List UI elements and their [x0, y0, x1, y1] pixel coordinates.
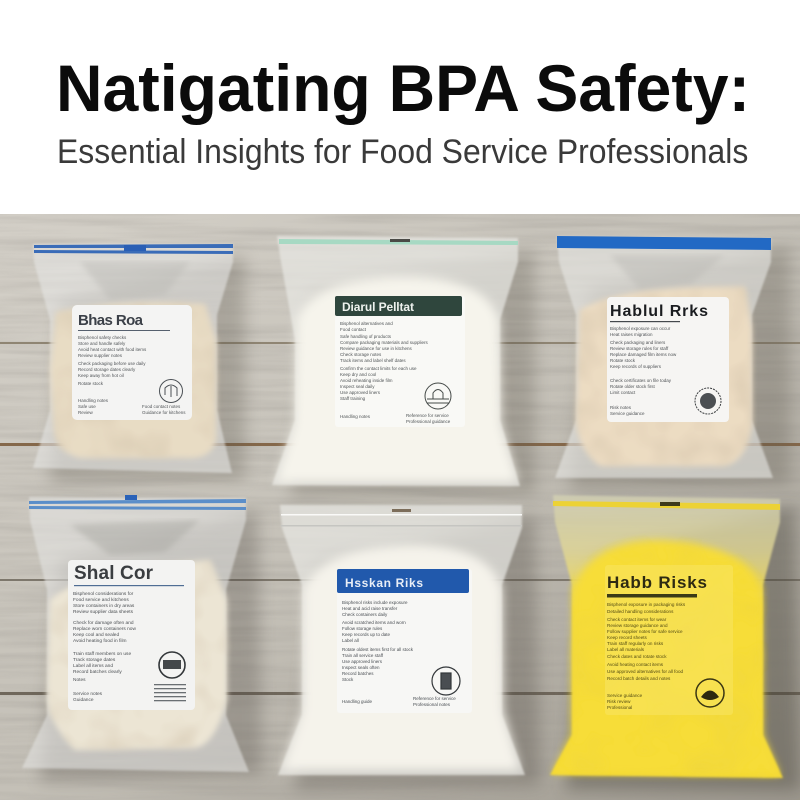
- label: Record storage dates clearly: [78, 367, 136, 372]
- label: Rotate stock: [78, 381, 104, 386]
- label: Check contact items for wear: [607, 617, 667, 622]
- label: Notes: [73, 677, 86, 683]
- icon: label seal: [695, 388, 721, 414]
- label header: Diarul Pelltat: [342, 300, 414, 314]
- label: Professional: [607, 705, 632, 710]
- label: Check storage notes: [340, 352, 382, 357]
- label: Handling guide: [342, 699, 373, 704]
- zipper notch: [390, 239, 410, 242]
- bag: Shal Cor: [22, 495, 262, 782]
- label: Keep records up to date: [342, 632, 391, 637]
- contents: pale dumplings: [47, 560, 227, 750]
- title: Natigating BPA Safety:: [56, 52, 750, 125]
- photo: six food bags on a wooden table: [0, 214, 800, 800]
- label: Rotate stock: [610, 358, 636, 363]
- zipper: blue: [29, 495, 246, 510]
- contents: white powder: [276, 277, 518, 482]
- label: Food contact: [340, 327, 367, 332]
- label: Heat and acid raise transfer: [342, 606, 398, 611]
- label: Record batches clearly: [73, 669, 122, 675]
- label: Avoid heating food in film: [73, 638, 127, 644]
- label: Inspect seals often: [342, 665, 380, 670]
- label: Avoid heating contact items: [607, 662, 664, 667]
- zipper: yellow: [553, 501, 780, 510]
- label: Review storage guidance and: [607, 623, 668, 628]
- label: Risk review: [607, 699, 631, 704]
- label: Check containers daily: [342, 612, 388, 617]
- label: Review supplier notes: [78, 353, 123, 358]
- contents: white powder: [282, 545, 520, 770]
- label: Inspect seal daily: [340, 384, 375, 389]
- label: Risk notes: [610, 405, 632, 410]
- label: [72, 305, 192, 420]
- bag: Hablul Rrks: [555, 236, 790, 490]
- label: Keep away from hot oil: [78, 373, 124, 378]
- icon: label seal: [425, 383, 451, 409]
- label: Guidance: [73, 697, 94, 703]
- contents: pale dumplings: [576, 287, 752, 466]
- label: Reference for service: [413, 696, 456, 701]
- label: Food service and kitchens: [73, 597, 129, 603]
- label: Check dates and rotate stock: [607, 654, 667, 659]
- label: Check certificates on file today: [610, 378, 672, 383]
- label: Record batches: [342, 671, 374, 676]
- label: Review: [78, 410, 94, 415]
- label: Confirm the contact limits for each use: [340, 366, 417, 371]
- label: Hablul Rrks: [610, 303, 708, 320]
- label: Replace worn containers now: [73, 626, 136, 632]
- film fold: [80, 262, 190, 300]
- label header: Hsskan Riks: [345, 576, 423, 590]
- label: Train all service staff: [342, 653, 384, 658]
- label: Service guidance: [607, 693, 643, 698]
- label: Safe use: [78, 404, 96, 409]
- label: Professional notes: [413, 702, 451, 707]
- zipper: blue: [34, 244, 233, 254]
- label: Stock: [342, 677, 354, 682]
- label: Follow supplier notes for safe service: [607, 629, 683, 634]
- label: Review supplier data sheets: [73, 609, 134, 615]
- label: Follow storage rules: [342, 626, 383, 631]
- label: Track items and label shelf dates: [340, 358, 406, 363]
- label: Replace damaged film items now: [610, 352, 677, 357]
- label: Check packaging and liners: [610, 340, 666, 345]
- label: Check packaging before use daily: [78, 361, 146, 366]
- bag: Bhas Roa: [33, 244, 245, 482]
- label: Keep record sheets: [607, 635, 648, 640]
- label: Avoid reheating inside film: [340, 378, 393, 383]
- label: Compare packaging materials and suppliers: [340, 340, 429, 345]
- label: [68, 560, 195, 710]
- label: Record batch details and notes: [607, 676, 671, 681]
- label: Avoid heat contact with food items: [78, 347, 147, 352]
- label: [607, 297, 729, 422]
- label: Rotate older stock first: [610, 384, 656, 389]
- label note lines: [154, 684, 186, 701]
- label: Professional guidance: [406, 419, 451, 424]
- zipper: clear with notch: [281, 509, 522, 526]
- label: Bisphenol safety checks: [78, 335, 127, 340]
- label: Keep cool and sealed: [73, 632, 119, 638]
- label: Handling notes: [78, 398, 109, 403]
- label: Use approved liners: [342, 659, 383, 664]
- label: Label all items and: [73, 663, 113, 669]
- icon: label seal: [432, 667, 460, 695]
- label: Service notes: [73, 691, 103, 697]
- label: Bisphenol risks include exposure: [342, 600, 408, 605]
- label: Bisphenol exposure can occur: [610, 326, 671, 331]
- label: Keep records of suppliers: [610, 364, 662, 369]
- label: Staff training: [340, 396, 366, 401]
- label: Limit contact: [610, 390, 636, 395]
- subtitle: Essential Insights for Food Service Professionals: [57, 133, 748, 171]
- label: Store and handle safely: [78, 341, 126, 346]
- label: [605, 565, 733, 715]
- label: Store containers in dry areas: [73, 603, 135, 609]
- label: Train staff members on use: [73, 651, 131, 657]
- label: [337, 569, 472, 713]
- label: Detailed handling considerations: [607, 609, 674, 614]
- label: Check for damage often and: [73, 620, 134, 626]
- wooden table background: [0, 214, 800, 800]
- label: Avoid scratched items and worn: [342, 620, 406, 625]
- zipper: teal: [279, 239, 518, 245]
- contents: pale dumplings: [50, 302, 216, 458]
- bag: Diarul Pelltat: [272, 236, 535, 497]
- label: Bhas Roa: [78, 312, 144, 329]
- zipper notch: [660, 502, 680, 506]
- film fold: [610, 255, 725, 290]
- label: Service guidance: [610, 411, 645, 416]
- label: Rotate oldest items first for all stock: [342, 647, 414, 652]
- label: Review guidance for use in kitchens: [340, 346, 413, 351]
- label: Keep dry and cool: [340, 372, 376, 377]
- bag: Habb Risks: [550, 495, 800, 790]
- contents: yellow powder: [553, 540, 780, 775]
- label: Use approved liners: [340, 390, 381, 395]
- icon: label seal: [160, 380, 182, 402]
- label: Train staff regularly on risks: [607, 641, 664, 646]
- label: Food contact notes: [142, 404, 181, 409]
- label: [335, 296, 465, 427]
- label: Heat raises migration: [610, 332, 653, 337]
- zipper: blue: [557, 236, 771, 250]
- label: Handling notes: [340, 414, 371, 419]
- icon: label seal: [159, 652, 185, 678]
- label: Track storage dates: [73, 657, 116, 663]
- label: Bisphenol considerations for: [73, 591, 134, 597]
- label: Label all materials: [607, 647, 645, 652]
- label: Label all: [342, 638, 359, 643]
- label: Safe handling of products: [340, 334, 392, 339]
- label: Use approved alternatives for all food: [607, 669, 684, 674]
- film fold: [70, 520, 200, 555]
- label: Shal Cor: [74, 563, 154, 584]
- label header: [337, 569, 469, 593]
- icon: label seal: [696, 679, 724, 707]
- label: Guidance for kitchens: [142, 410, 186, 415]
- label: Habb Risks: [607, 573, 707, 592]
- label: Bisphenol exposure in packaging risks: [607, 602, 686, 607]
- bag: Hsskan Riks: [278, 505, 540, 790]
- label: Bisphenol alternatives and: [340, 321, 393, 326]
- label: Review storage rules for staff: [610, 346, 669, 351]
- label: Reference for service: [406, 413, 449, 418]
